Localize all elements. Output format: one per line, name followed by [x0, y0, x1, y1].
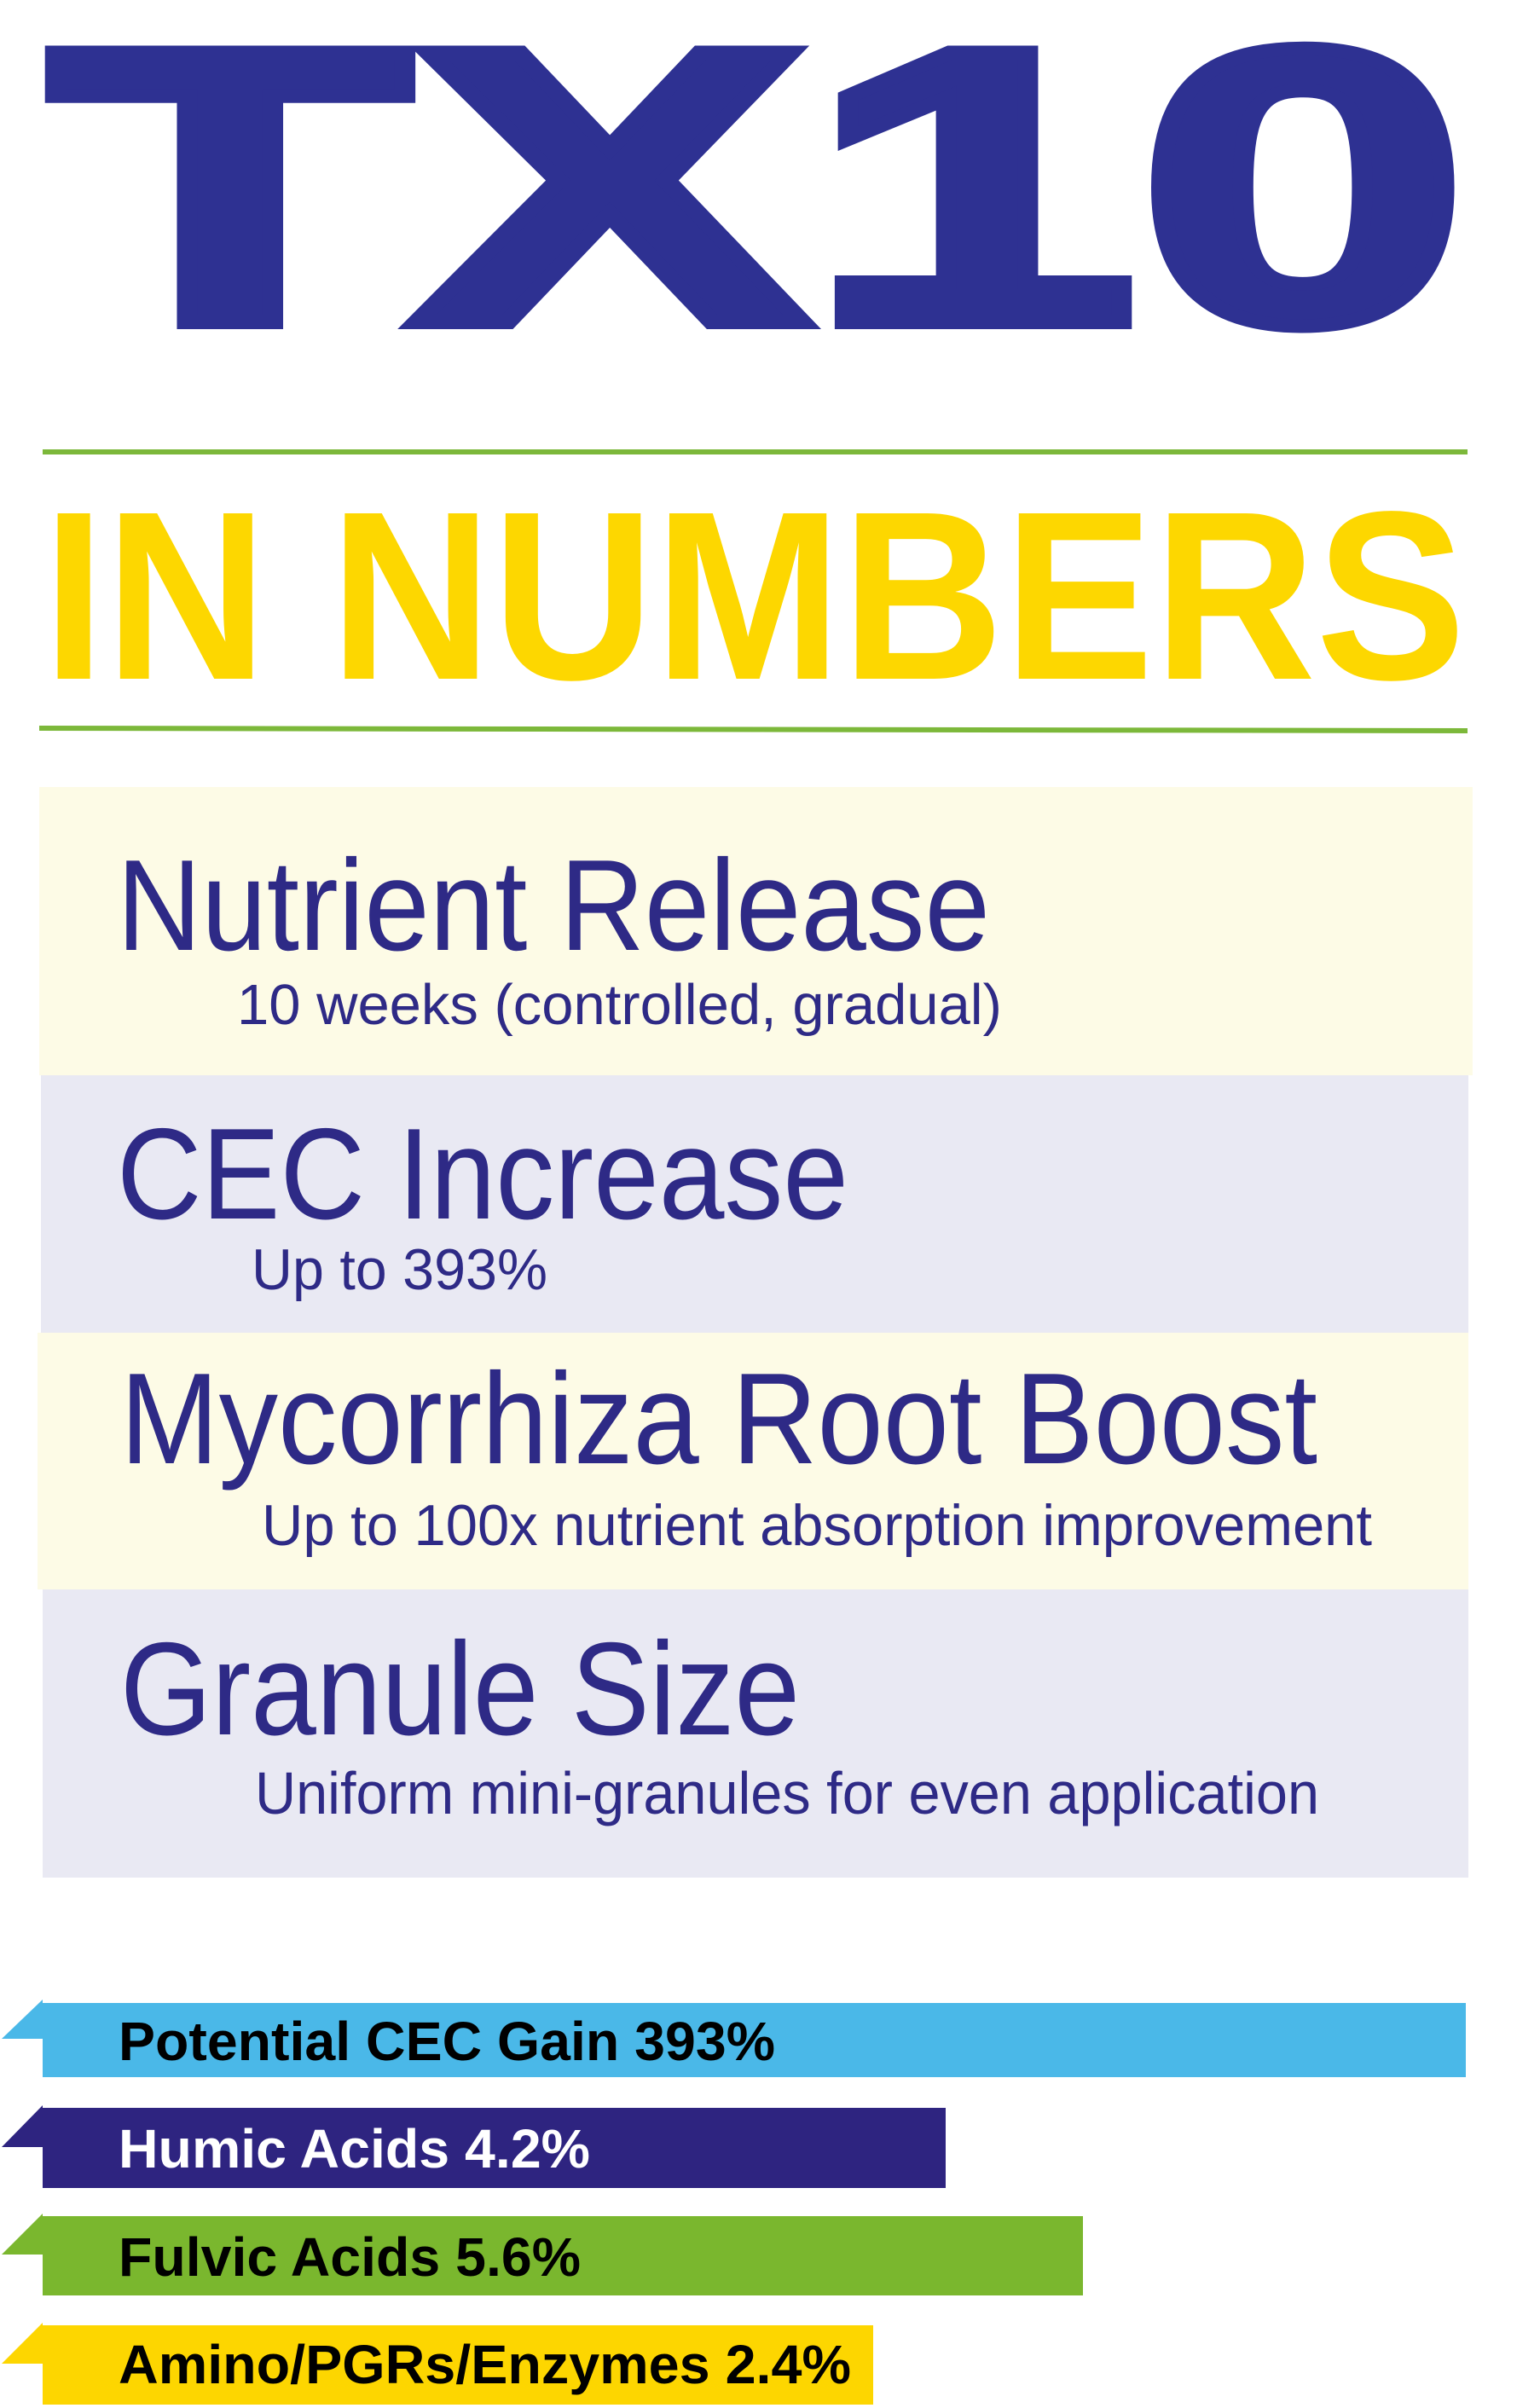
- panel: granule size: [43, 1589, 1468, 1878]
- bar: amino/PGRs/enzymes: Amino/PGRs/Enzymes 2.4%: [119, 2334, 851, 2395]
- heading: IN NUMBERS: IN NUMBERS: [43, 461, 1466, 730]
- heading: Nutrient Release: Nutrient Release: [117, 833, 990, 978]
- bar: potential CEC gain: Potential CEC Gain 393%: [119, 2011, 775, 2072]
- bar: potential CEC gain: [2, 2000, 1466, 2077]
- heading: CEC Increase: CEC Increase: [117, 1102, 848, 1247]
- heading: Granule Size: Granule Size: [120, 1615, 800, 1763]
- heading: Mycorrhiza Root Boost: Mycorrhiza Root Boost: [120, 1346, 1317, 1491]
- bar: amino/PGRs/enzymes: [2, 2323, 873, 2405]
- bar: fulvic acids: Fulvic Acids 5.6%: [119, 2226, 581, 2288]
- bar: humic acids: [2, 2105, 946, 2188]
- panel: nutrient release: [39, 787, 1473, 1075]
- text: 10 weeks: 10 weeks (controlled, gradual): [237, 973, 1002, 1037]
- text: Up to 393%: Up to 393%: [252, 1237, 547, 1302]
- text: up to 100x: Up to 100x nutrient absorption improvement: [262, 1493, 1372, 1558]
- bar: fulvic acids: [2, 2214, 1083, 2295]
- panel: CEC increase: [41, 1075, 1468, 1334]
- text: uniform mini-granules: Uniform mini-granules for even application: [255, 1760, 1319, 1826]
- bar: humic acids: Humic Acids 4.2%: [119, 2118, 590, 2179]
- panel: mycorrhiza: [38, 1333, 1468, 1589]
